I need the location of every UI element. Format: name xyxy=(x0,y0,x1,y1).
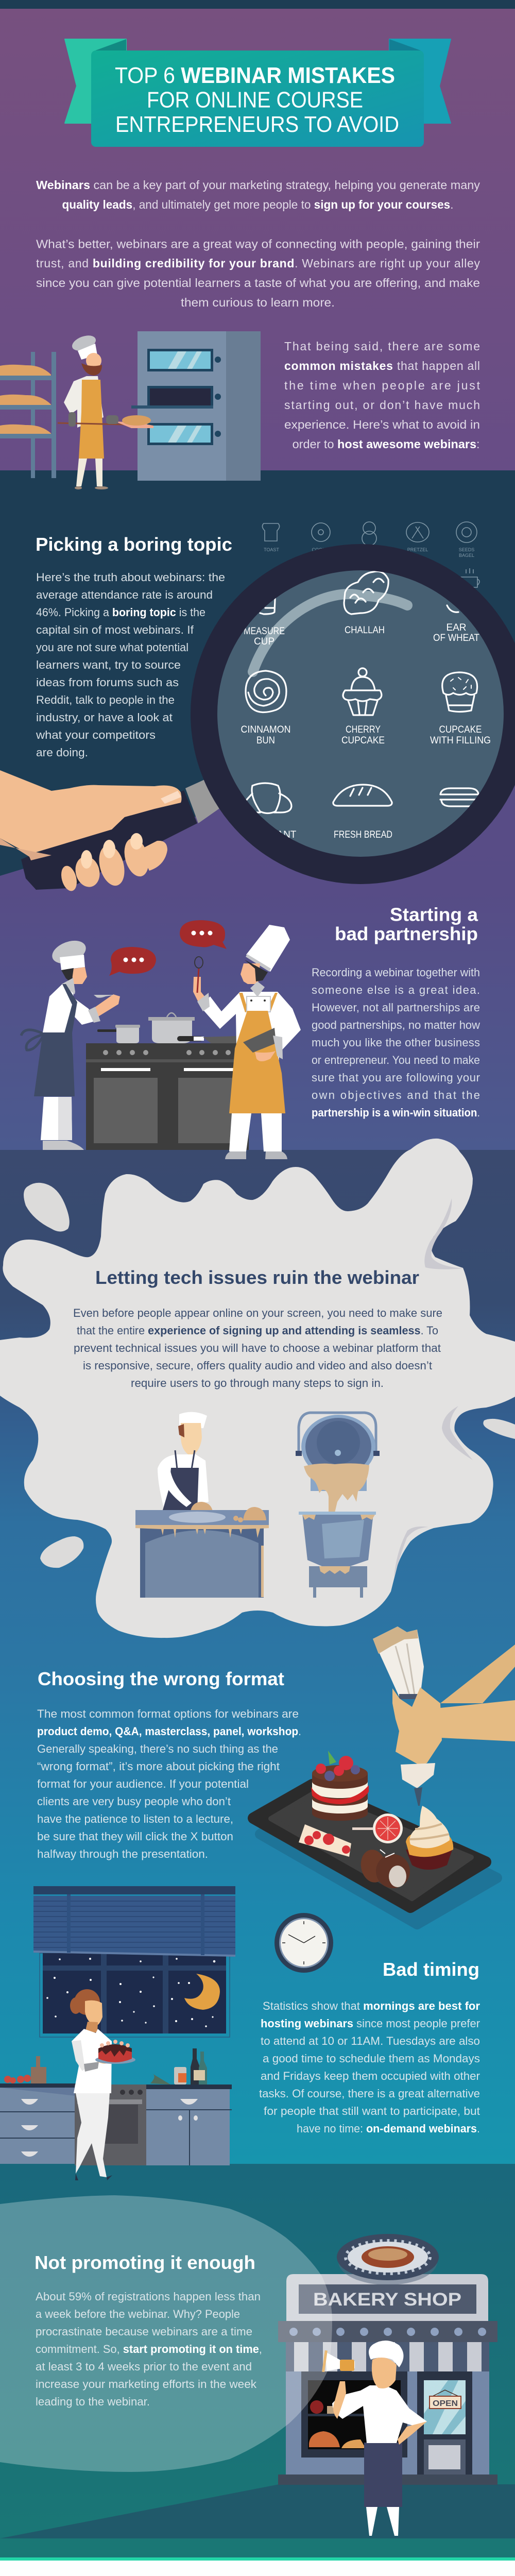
intro paragraph 3: common mistakes that happen all xyxy=(284,359,480,372)
illustration: stove with pots xyxy=(86,1013,249,1150)
lens labels: CINNAMON xyxy=(241,724,290,735)
title text: FOR ONLINE COURSE xyxy=(147,88,363,112)
text: not promoting it enough: leading to the webinar. xyxy=(36,2395,150,2408)
background: section 1 navy xyxy=(0,470,515,883)
text: starting a bad partnership: However, not all partnerships are xyxy=(312,1001,480,1014)
cake xyxy=(311,1751,369,1821)
title text xyxy=(115,63,399,137)
text: choosing the wrong format: format for your audience. If your potential xyxy=(37,1777,249,1790)
text: picking a boring topic: you are not sure what potential xyxy=(36,641,188,654)
magnifier handle xyxy=(21,775,222,890)
text: starting a bad partnership: own objectives and that the xyxy=(312,1089,480,1101)
open sign xyxy=(430,2390,461,2409)
text: choosing the wrong format: “wrong format”, it’s more about picking the right xyxy=(37,1760,280,1773)
background: blue gradient sections 3 to 5 xyxy=(0,1150,515,2164)
lens labels: CROISSANT xyxy=(239,829,297,840)
text: picking a boring topic xyxy=(36,571,225,759)
text: picking a boring topic: are doing. xyxy=(36,746,88,759)
text: picking a boring topic: 46%. Picking a boring topic is the xyxy=(36,606,205,619)
text: picking a boring topic: ideas from forums such as xyxy=(36,676,179,689)
text: picking a boring topic: industry, or have a look at xyxy=(36,711,173,724)
text: picking a boring topic: average attendance rate is around xyxy=(36,588,213,601)
shop roof xyxy=(286,2274,488,2321)
text: bad timing: Statistics show that mornings are best for xyxy=(263,1999,480,2012)
sign text: BAKERY SHOP xyxy=(313,2290,461,2310)
illustration: bakery shop xyxy=(278,2234,497,2485)
intro paragraph 3: experience. Here’s what to avoid in xyxy=(284,418,480,431)
intro paragraph 3: starting out, or don’t have much xyxy=(284,398,480,412)
lens highlight arc xyxy=(253,594,407,672)
translucent spotlight blob xyxy=(0,2195,332,2472)
background icons: small bakery icons: COOKIES xyxy=(358,547,380,552)
illustration: right chef xyxy=(193,925,301,1159)
ground shadow xyxy=(0,2484,515,2538)
text: picking a boring topic: Reddit, talk to people in the xyxy=(36,693,175,706)
text: letting tech issues: Even before people appear online on your screen, you need to make sure xyxy=(73,1307,442,1319)
heading: bad timing: Bad timing xyxy=(383,1959,479,1980)
text: not promoting it enough: About 59% of registrations happen less than xyxy=(36,2290,261,2303)
heading: not promoting it enough: Not promoting it enough xyxy=(35,2252,255,2273)
splat panel xyxy=(0,1139,515,1638)
title text: TOP 6 WEBINAR MISTAKES xyxy=(115,63,395,88)
open sign: OPEN xyxy=(433,2399,458,2408)
background: section 6 teal xyxy=(0,2164,515,2557)
text: not promoting it enough: procrastinate because webinars are a time xyxy=(36,2325,252,2338)
text: starting a bad partnership: good partnerships, no matter how xyxy=(312,1019,480,1031)
shop door xyxy=(417,2371,472,2475)
text: letting tech issues xyxy=(73,1307,442,1389)
background icons: small bakery icons: SEEDS xyxy=(459,547,474,552)
text: starting a bad partnership: Recording a webinar together with xyxy=(312,966,480,979)
title ribbon xyxy=(65,39,451,147)
icon: cherry cupcake xyxy=(343,668,382,715)
counter items xyxy=(4,2048,207,2084)
illustration: overflowing mixer xyxy=(296,1413,380,1598)
intro paragraph 3: order to host awesome webinars: xyxy=(293,437,480,451)
heading: letting tech issues: Letting tech issues ruin the webinar xyxy=(95,1267,419,1288)
speech bubble right xyxy=(180,920,227,949)
illustration: baker at messy table xyxy=(135,1412,269,1598)
intro paragraph 3 xyxy=(284,340,480,451)
text: choosing the wrong format: clients are very busy people who don’t xyxy=(37,1795,231,1808)
heading: starting a bad partnership: Starting a xyxy=(390,904,478,925)
speech bubble left xyxy=(109,947,156,976)
green divider xyxy=(0,2557,515,2561)
text: not promoting it enough: a week before the webinar. Why? People xyxy=(36,2308,240,2320)
background icons: small bakery icons: TOAST xyxy=(264,547,279,552)
hand holding magnifier xyxy=(0,770,181,893)
text: picking a boring topic: learners want, try to source xyxy=(36,658,181,671)
lens labels: CUPCAKE xyxy=(341,735,385,746)
icon: fresh bread xyxy=(333,785,392,806)
illustration: kitchen counters xyxy=(0,2048,232,2165)
intro paragraph 2: trust, and building credibility for your brand. Webinars are right up your alley xyxy=(36,257,480,270)
chocolates xyxy=(358,1848,410,1888)
text: not promoting it enough: commitment. So, start promoting it on time, xyxy=(36,2343,262,2355)
lens labels: OF WHEAT xyxy=(433,633,479,643)
intro paragraph 1: Webinars can be a key part of your marketing strategy, helping you generate many xyxy=(36,178,480,192)
cupcake xyxy=(406,1806,453,1870)
text: choosing the wrong format: halfway through the presentation. xyxy=(37,1848,208,1860)
text: starting a bad partnership: someone else is a great idea. xyxy=(312,984,480,996)
illustration: night window xyxy=(40,1953,230,2037)
intro paragraph 3: That being said, there are some xyxy=(284,340,480,353)
icon: measure cup xyxy=(259,598,276,615)
intro paragraph 2: them curious to learn more. xyxy=(181,296,335,309)
illustration: baker with peel xyxy=(58,333,153,489)
text: starting a bad partnership: or entrepreneur. You need to make xyxy=(312,1054,480,1066)
illustration: wall clock xyxy=(274,1913,333,1973)
text: not promoting it enough xyxy=(36,2290,262,2408)
text: starting a bad partnership: partnership is a win-win situation. xyxy=(312,1106,480,1119)
text: bad timing: and Fridays keep them occupied with other xyxy=(261,2070,480,2082)
text: letting tech issues: that the entire experience of signing up and attending is seamless. To xyxy=(77,1324,438,1337)
icon: croissant xyxy=(243,783,291,813)
text: choosing the wrong format: have the patience to listen to a lecture, xyxy=(37,1812,233,1825)
lens labels xyxy=(239,622,491,840)
text: bad timing: a good time to schedule them as Mondays xyxy=(263,2052,480,2065)
illustration: pastry chef with cake xyxy=(70,1989,135,2180)
text: choosing the wrong format: product demo, Q&A, masterclass, panel, workshop. xyxy=(37,1725,301,1738)
illustration: chef with megaphone xyxy=(322,2341,427,2536)
text: letting tech issues: prevent technical issues you will have to choose a webinar platform that xyxy=(74,1342,441,1354)
text: choosing the wrong format: Generally speaking, there’s no such thing as the xyxy=(37,1742,278,1755)
text: choosing the wrong format xyxy=(37,1707,301,1860)
text: picking a boring topic: capital sin of most webinars. If xyxy=(36,623,194,636)
text: bad timing: hosting webinars since most people prefer xyxy=(261,2017,480,2030)
illustration: left chef xyxy=(21,937,120,1150)
text: letting tech issues: require users to go through many steps to sign in. xyxy=(131,1377,384,1389)
illustration: bread rack xyxy=(0,352,56,478)
lens labels: CUPCAKE xyxy=(439,724,482,735)
lens labels: EAR xyxy=(446,622,467,633)
lens labels: FRESH BREAD xyxy=(334,829,392,840)
illustration: oven xyxy=(131,331,261,481)
heading: starting a bad partnership: bad partnership xyxy=(335,923,478,944)
text: bad timing xyxy=(259,1999,480,2135)
intro paragraph 2: since you can give potential learners a taste of what you are offering, and make xyxy=(36,276,480,290)
illustration: window blinds xyxy=(33,1886,235,1957)
lens labels: CHERRY xyxy=(346,724,381,735)
illustration: dessert tray xyxy=(253,1751,497,1924)
text: bad timing: have no time: on-demand webinars. xyxy=(297,2122,480,2135)
background icons: small bakery icons: BAGEL xyxy=(459,553,474,558)
icon: cupcake with filling xyxy=(442,672,477,712)
heading: picking a boring topic: Picking a boring topic xyxy=(36,534,232,555)
text: bad timing: for people that still want to participate, but xyxy=(264,2105,480,2117)
lens labels: BUN xyxy=(256,735,275,746)
text: choosing the wrong format: The most common format options for webinars are xyxy=(37,1707,299,1720)
text: starting a bad partnership: sure that you are following your xyxy=(312,1071,480,1084)
background: section 2 purple xyxy=(0,673,515,1150)
footer panel xyxy=(0,2561,515,2576)
icon: challah xyxy=(344,571,388,614)
background: intro panel xyxy=(0,9,515,470)
icon: ear of wheat xyxy=(447,605,458,612)
text: choosing the wrong format: be sure that they will click the X button xyxy=(37,1830,233,1843)
heading: starting a bad partnership xyxy=(335,904,478,944)
magnifier ring xyxy=(191,544,515,884)
lens labels: WITH FILLING xyxy=(430,735,491,746)
nougat xyxy=(299,1824,351,1857)
round sign xyxy=(337,2234,439,2285)
lens labels: MEASURE xyxy=(244,626,285,637)
text: bad timing: to attend at 10 or 11AM. Tuesdays are also xyxy=(261,2035,480,2047)
background icons: small bakery icons: COOKIE xyxy=(312,547,330,552)
intro paragraph 1 xyxy=(36,178,480,211)
shop window xyxy=(301,2371,407,2458)
background icons: small bakery icons: PRETZEL xyxy=(407,547,428,552)
intro paragraph 1: quality leads, and ultimately get more people to sign up for your courses. xyxy=(62,198,453,211)
icon: macaron xyxy=(440,788,478,806)
illustration: piping bag and hands xyxy=(373,1626,515,1806)
lollipop xyxy=(352,1814,403,1843)
magnifier lens with icons xyxy=(217,570,504,857)
background: top strip xyxy=(0,0,515,9)
intro paragraph 3: the time when people are just xyxy=(284,379,480,392)
intro paragraph 2: What’s better, webinars are a great way of connecting with people, gaining their xyxy=(36,237,480,250)
text: not promoting it enough: at least 3 to 4 weeks prior to the event and xyxy=(36,2360,252,2373)
icon: cinnamon bun xyxy=(246,671,286,712)
text: starting a bad partnership xyxy=(312,966,480,1119)
lens labels: CUP xyxy=(254,636,274,647)
background icons: small bakery icons xyxy=(262,522,479,587)
text: letting tech issues: is responsive, secure, offers quality audio and video and also doesn’t xyxy=(83,1359,432,1372)
text: picking a boring topic: Here’s the truth about webinars: the xyxy=(36,571,225,584)
title text: ENTREPRENEURS TO AVOID xyxy=(115,112,399,137)
text: starting a bad partnership: much you like the other business xyxy=(312,1036,480,1049)
lens labels: CHALLAH xyxy=(345,625,385,636)
heading: choosing the wrong format: Choosing the wrong format xyxy=(38,1668,284,1689)
text: not promoting it enough: increase your marketing efforts in the week xyxy=(36,2378,257,2391)
floor band xyxy=(0,2538,515,2557)
text: picking a boring topic: what your competitors xyxy=(36,728,156,741)
text: bad timing: tasks. Of course, there is a great alternative xyxy=(259,2087,480,2100)
intro paragraph 2 xyxy=(36,237,480,309)
